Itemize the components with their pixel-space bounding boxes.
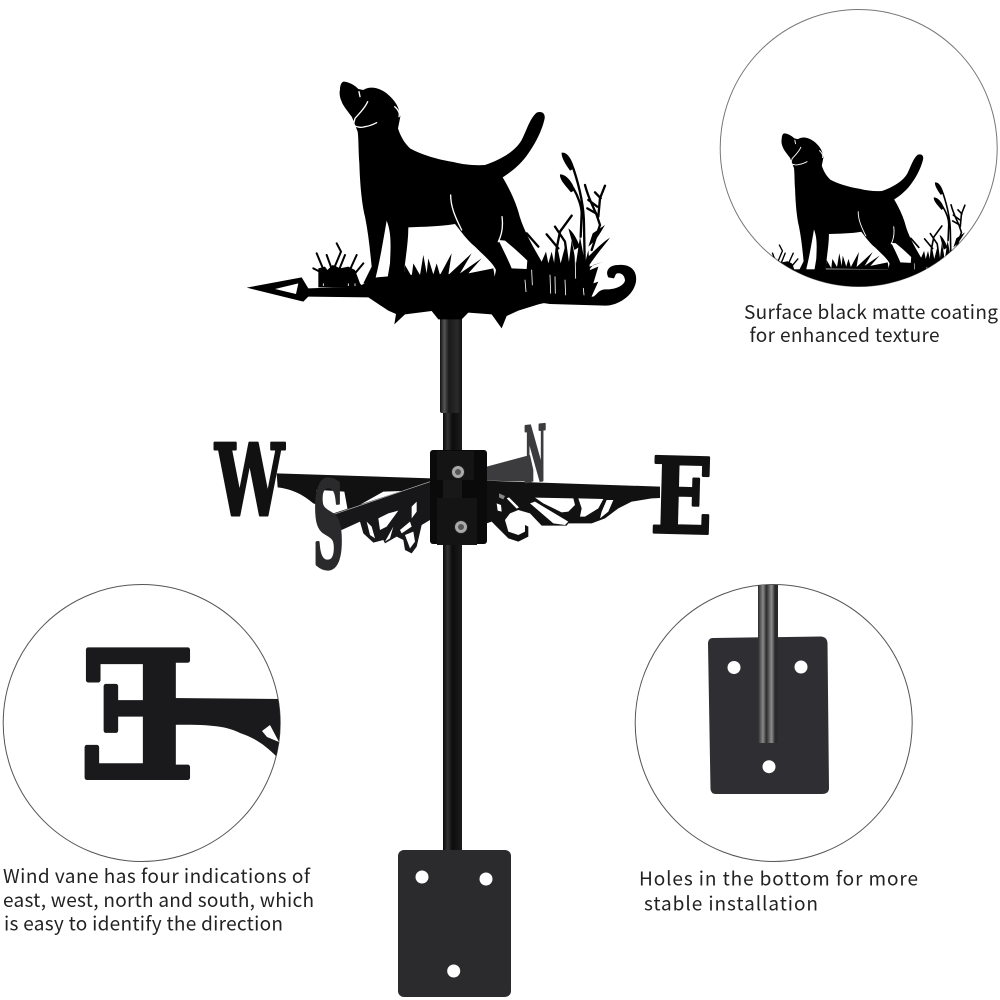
arrow and ground base [247,273,550,328]
circle callout: four direction letters [3,584,314,936]
circle callout: matte coating detail: for enhanced texture [750,321,940,348]
caption: holes: Holes in the bottom for more [639,864,918,892]
letter W: W [214,424,285,539]
dog [340,82,545,283]
inset plate [708,636,829,794]
letter S: S [313,455,344,596]
circle callout: matte coating detail [720,10,998,348]
letter N: N [524,410,546,501]
screw bottom [454,520,468,534]
photo: dog silhouette vane top [247,82,636,328]
west arm [277,473,432,513]
clamp bracket [430,450,487,545]
circle callout: mounting holes [635,584,918,916]
caption: coating: Surface black matte coating [744,298,998,325]
east arm [485,481,660,542]
south arm [323,482,438,553]
grass middle [403,253,495,278]
east arm cutouts [497,497,613,525]
letter E: E [649,434,714,558]
inset mirrored letter E: E [79,613,195,819]
inset dog [772,133,966,286]
screw top [452,466,464,478]
photo: mounting base plate [398,850,511,997]
north arm [487,455,533,482]
photo: compass arms with direction letters [214,410,714,596]
arrow cutout [275,283,298,294]
grass left [313,243,363,287]
circle callout: four direction letters: east, west, north and south, which [3,886,314,913]
circle callout: four direction letters: is easy to identify the direction [4,910,283,936]
circle callout: mounting holes: stable installation [644,890,818,916]
south scrollwork cutouts [367,502,417,548]
inset arm [176,698,280,756]
photo: weather vane pole [440,312,462,852]
inset pole [758,585,778,743]
caption: directions: Wind vane has four indications of [3,862,311,889]
grass, cattails and scroll tail right [525,153,636,306]
